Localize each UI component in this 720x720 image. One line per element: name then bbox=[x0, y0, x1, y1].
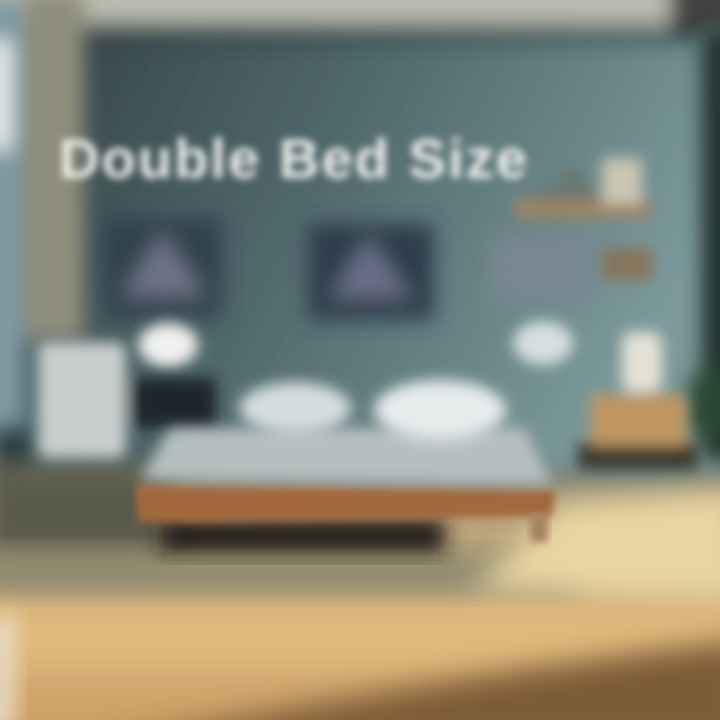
wall artwork: centre bbox=[308, 224, 434, 320]
bed shadow bbox=[160, 520, 445, 552]
ceiling bbox=[0, 0, 720, 40]
floor bbox=[0, 465, 720, 720]
wall artwork: left bbox=[104, 218, 222, 318]
bed leg bbox=[530, 514, 548, 542]
left dresser bbox=[38, 342, 216, 458]
pillows bbox=[239, 382, 351, 434]
wall lamps bbox=[138, 321, 573, 367]
bed frame bbox=[135, 484, 555, 522]
wall artwork: right bbox=[492, 234, 590, 304]
mattress bbox=[140, 428, 552, 484]
shelves bbox=[515, 158, 652, 280]
title: Double Bed Size bbox=[59, 127, 527, 190]
right nightstand and lamp bbox=[578, 332, 698, 470]
bed bbox=[135, 380, 555, 552]
left window and column bbox=[0, 0, 84, 485]
right dark edge bbox=[686, 30, 720, 460]
